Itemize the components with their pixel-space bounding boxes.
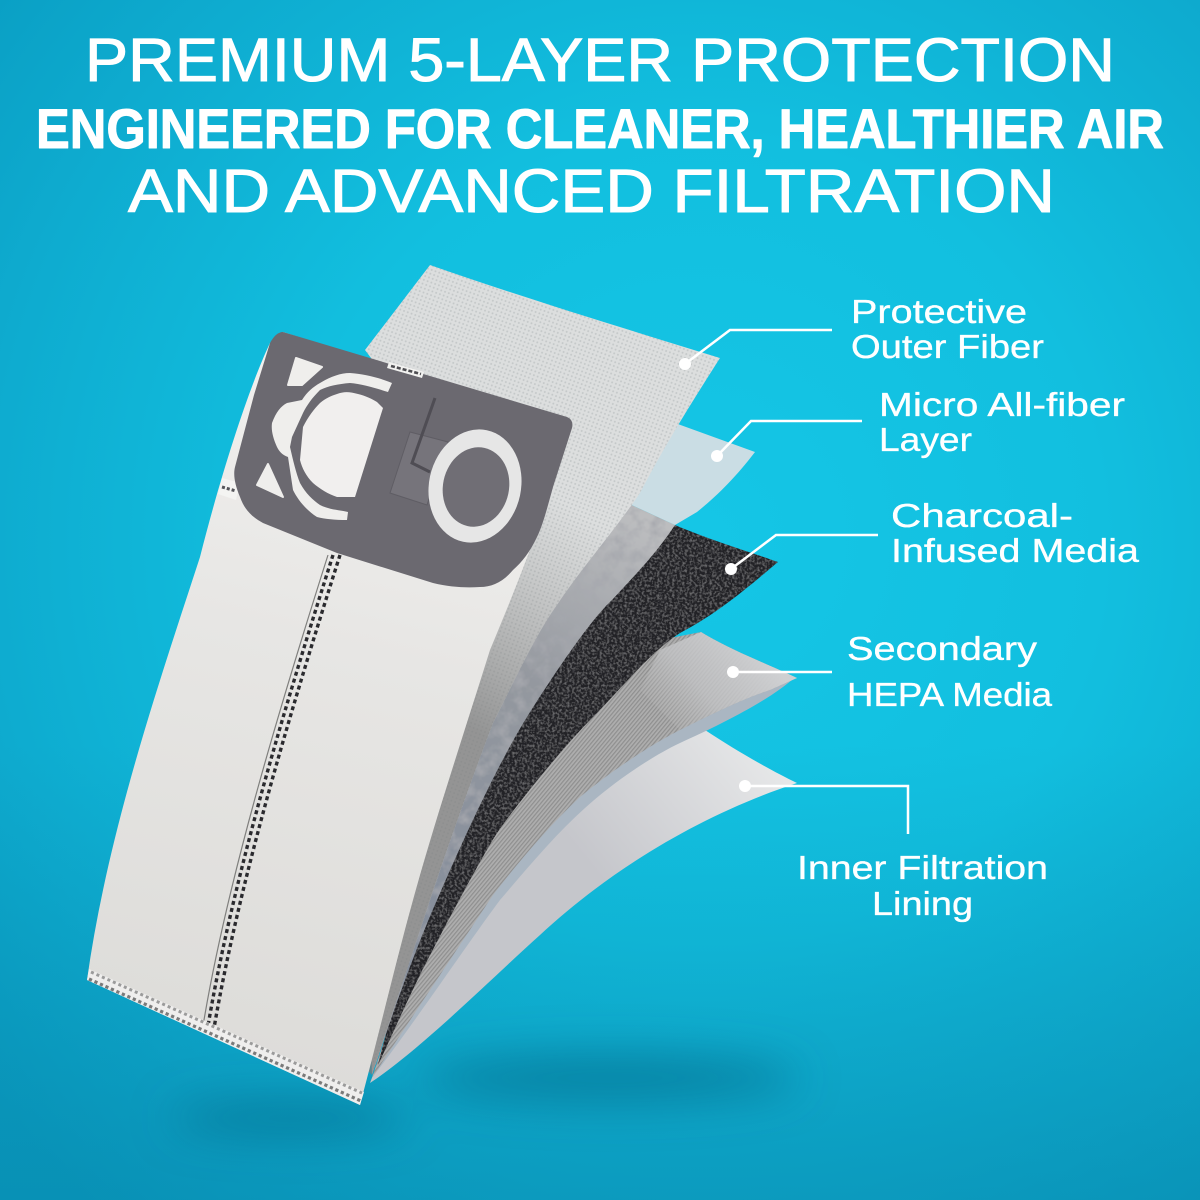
label: protective outer fiber: Protective: [851, 293, 1027, 330]
collar plate slit: [412, 398, 435, 472]
HEPA light top area: [640, 632, 797, 730]
layer: protective outer fiber: [300, 265, 720, 1075]
collar cutout: main window: [300, 392, 383, 497]
layer: felt carbon media: [375, 498, 675, 1067]
filter bag exploded illustration: [87, 265, 797, 1105]
label: micro all-fiber layer: Layer: [879, 421, 972, 458]
layer: micro all-fiber: [600, 423, 755, 525]
collar cutout: upper wedge: [288, 358, 322, 385]
label: charcoal-infused media: Infused Media: [891, 532, 1140, 569]
leader: protective outer fiber: [679, 330, 832, 370]
leader: charcoal-infused media: [725, 535, 878, 575]
layer: secondary HEPA edge band: [372, 678, 794, 1078]
layer: charcoal-infused media: [378, 525, 778, 1065]
leader: secondary HEPA media: [727, 666, 832, 678]
label: micro all-fiber layer: Micro All-fiber: [879, 386, 1125, 423]
bag body: [87, 332, 560, 1105]
label: protective outer fiber: [851, 293, 1044, 365]
label: secondary HEPA media: HEPA Media: [847, 676, 1053, 713]
collar raised plate: [390, 432, 448, 505]
floor shadow: [170, 1054, 800, 1134]
collar cutout: C band: [272, 373, 392, 520]
title line 1: PREMIUM 5-LAYER PROTECTION: [85, 26, 1115, 94]
title: [36, 26, 1164, 225]
bag side seam perforations: [207, 555, 340, 1034]
plastic collar: [234, 332, 572, 587]
label: inner filtration lining: Lining: [872, 885, 973, 922]
collar printed tag top: [387, 362, 424, 378]
layer: inner filtration lining: [370, 720, 797, 1083]
label: inner filtration lining: [797, 849, 1048, 922]
leader: inner filtration lining: [739, 780, 908, 834]
collar ring: [418, 421, 532, 551]
layer: secondary HEPA media: [372, 632, 797, 1078]
label: secondary HEPA media: Secondary: [847, 630, 1038, 667]
title line 3: AND ADVANCED FILTRATION: [128, 157, 1055, 225]
outer fiber lower shading: [300, 480, 640, 1075]
bag side seam thin line: [203, 555, 328, 1026]
bag printed tag left: [218, 478, 240, 500]
bag bottom seam: [87, 969, 364, 1105]
leader: micro all-fiber layer: [711, 421, 862, 462]
label: charcoal-infused media: Charcoal-: [891, 497, 1073, 534]
label: secondary HEPA media: [847, 630, 1053, 713]
label: micro all-fiber layer: [879, 386, 1125, 458]
label: charcoal-infused media: [891, 497, 1140, 569]
collar cutout: lower wedge: [257, 464, 283, 497]
label: protective outer fiber: Outer Fiber: [851, 328, 1044, 365]
label: inner filtration lining: Inner Filtration: [797, 849, 1048, 886]
